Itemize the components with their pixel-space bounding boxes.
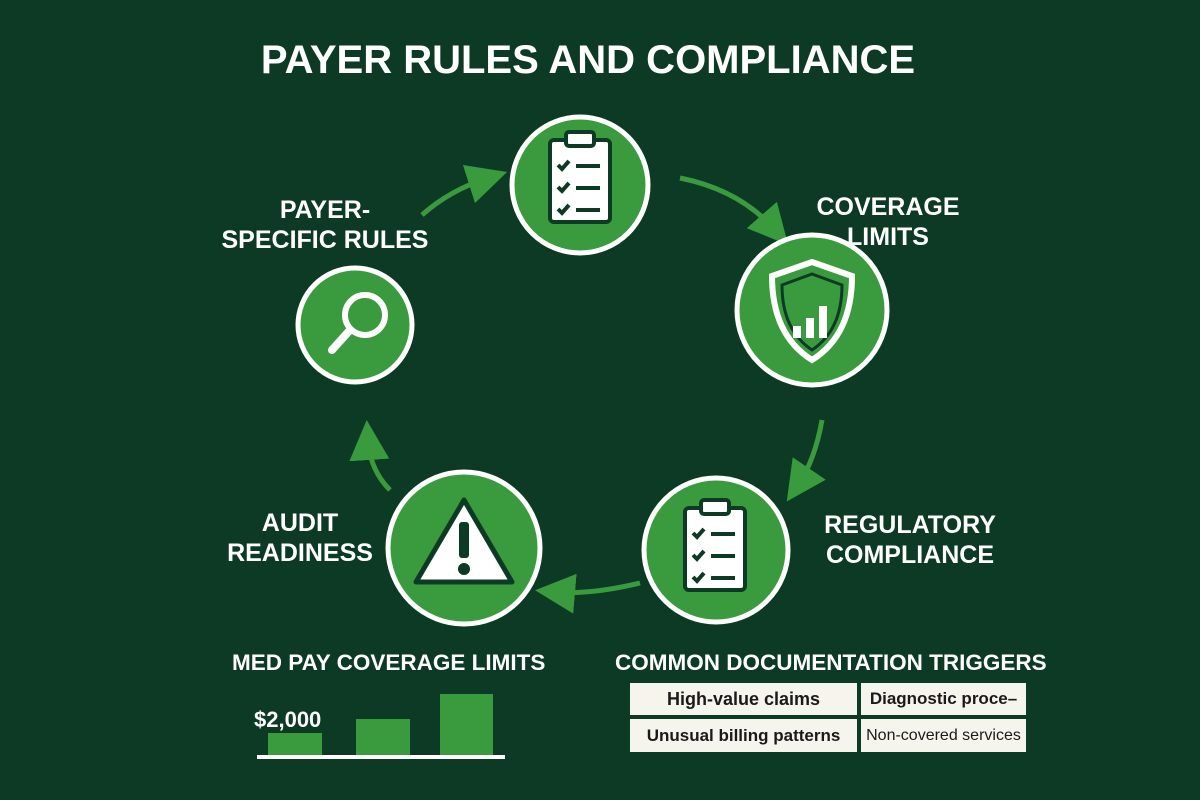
- table: [630, 683, 1026, 752]
- table: Unusual billing patterns: [647, 726, 840, 745]
- circle: magnifier: [298, 268, 412, 382]
- label: coverage limits: LIMITS: [847, 223, 929, 251]
- circle: warning: [388, 472, 540, 624]
- title: PAYER RULES AND COMPLIANCE: [261, 38, 915, 82]
- label: coverage limits: COVERAGE: [816, 193, 960, 221]
- table: Non-covered services: [866, 727, 1021, 744]
- circle: top clipboard: [512, 117, 648, 253]
- label: regulatory compliance: [824, 511, 996, 569]
- label: regulatory compliance: COMPLIANCE: [826, 541, 994, 569]
- arrows: [368, 178, 822, 593]
- bar chart: [254, 694, 505, 759]
- table: High-value claims: [667, 689, 820, 709]
- label: payer-specific rules: SPECIFIC RULES: [222, 226, 428, 254]
- label: audit readiness: READINESS: [227, 539, 373, 567]
- label: audit readiness: AUDIT: [262, 509, 338, 537]
- circle: bottom-right clipboard: [644, 478, 788, 622]
- label: audit readiness: [227, 509, 373, 567]
- label: payer-specific rules: [222, 196, 428, 254]
- bar chart: $2,000: [254, 707, 321, 732]
- heading: triggers: COMMON DOCUMENTATION TRIGGERS: [615, 650, 1047, 675]
- label: payer-specific rules: PAYER-: [280, 196, 370, 224]
- heading: med pay: MED PAY COVERAGE LIMITS: [232, 650, 545, 675]
- circle: shield: [737, 235, 887, 385]
- table: Diagnostic proce–: [870, 689, 1017, 708]
- label: coverage limits: [816, 193, 960, 251]
- label: regulatory compliance: REGULATORY: [824, 511, 996, 539]
